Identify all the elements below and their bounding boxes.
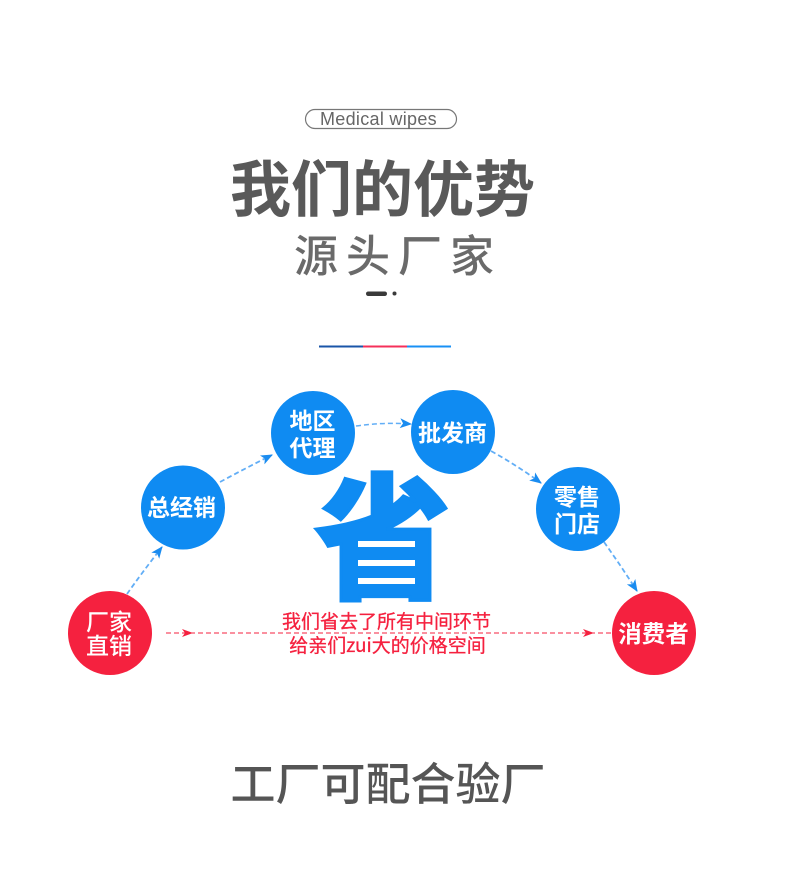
big character: 省: 省 <box>314 431 450 628</box>
node: 消费者 <box>612 591 696 675</box>
arrow: regional agent to wholesaler <box>356 423 411 426</box>
node: 地区代理 <box>271 391 355 475</box>
decorative dash and dot <box>366 292 396 296</box>
tricolor divider <box>319 346 451 348</box>
node: 批发商: 批发商 <box>418 414 487 448</box>
subtitle: 源头厂家 <box>294 220 502 284</box>
node: 零售门店: 零售 <box>554 478 600 512</box>
arrow: factory to distributor <box>127 547 162 594</box>
tag: Medical wipes: Medical wipes <box>320 109 437 129</box>
node: 零售门店: 门店 <box>554 505 600 539</box>
node: 地区代理: 代理 <box>290 429 336 463</box>
savings message <box>282 607 491 658</box>
node: 零售门店 <box>536 467 620 551</box>
node: 总经销 <box>141 466 225 550</box>
savings message: 我们省去了所有中间环节 <box>282 607 491 634</box>
node: 厂家直销 <box>68 591 152 675</box>
arrow: retail to consumer <box>604 542 637 591</box>
node: 厂家直销: 厂家 <box>86 603 132 637</box>
savings message: 给亲们zui大的价格空间 <box>289 631 486 658</box>
title: 我们的优势 <box>230 140 535 229</box>
bottom heading: 工厂可配合验厂 <box>230 748 546 813</box>
arrow: wholesaler to retail <box>491 451 541 483</box>
node: 总经销: 总经销 <box>147 488 216 522</box>
arrow: factory direct to consumer <box>166 629 612 637</box>
arrow: distributor to regional agent <box>220 455 272 482</box>
node: 批发商 <box>411 390 495 474</box>
node: 消费者: 消费者 <box>618 615 689 649</box>
node: 厂家直销: 直销 <box>86 627 132 661</box>
node: 地区代理: 地区 <box>290 402 336 436</box>
